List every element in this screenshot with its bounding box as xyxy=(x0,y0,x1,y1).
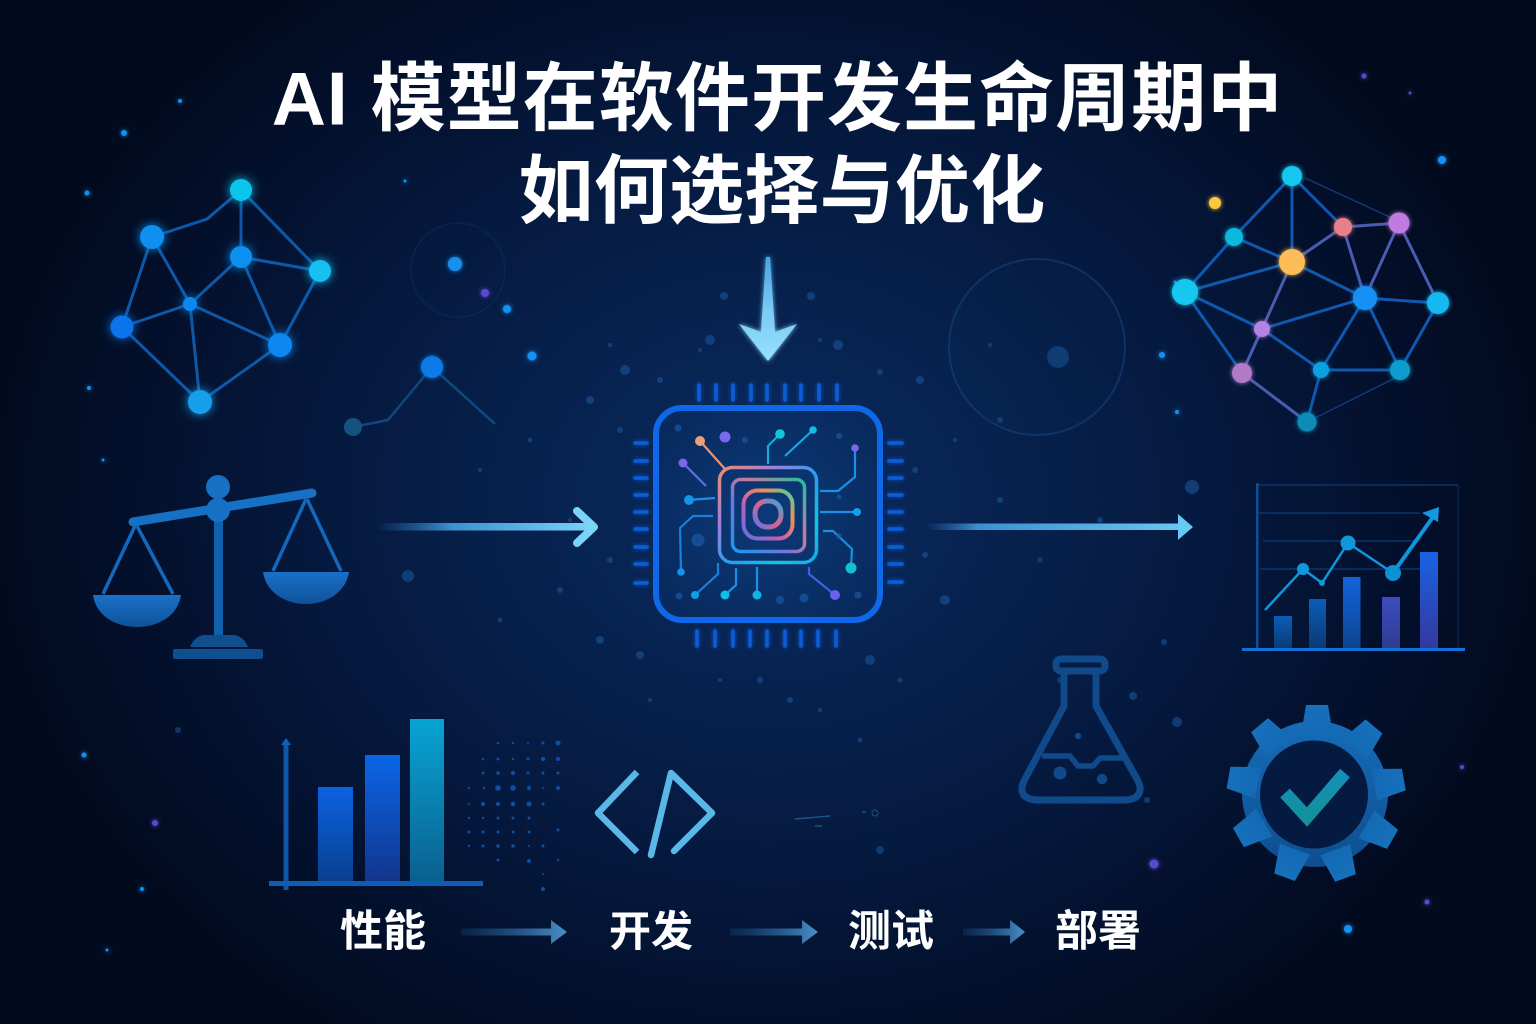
arrow: 性能 to 开发 xyxy=(461,920,567,944)
dot matrix xyxy=(468,740,560,891)
circuit traces xyxy=(680,430,857,595)
label: 测试: 测试 xyxy=(848,908,934,956)
label: 部署: 部署 xyxy=(1055,908,1141,956)
arrow: 测试 to 部署 xyxy=(963,920,1025,944)
icon: gear with check xyxy=(1226,705,1407,883)
background particles xyxy=(82,74,1464,952)
label: 开发: 开发 xyxy=(609,908,693,955)
label: 性能: 性能 xyxy=(340,908,426,956)
icon: code xyxy=(598,772,712,855)
arrow: left to chip xyxy=(375,511,594,543)
chip frame xyxy=(656,408,880,620)
title xyxy=(272,56,1283,233)
icon: network left xyxy=(110,179,331,414)
arrow: chip to right xyxy=(925,514,1193,540)
chip core xyxy=(720,468,816,562)
chip pins xyxy=(635,385,902,646)
icon: network right xyxy=(1172,166,1449,432)
chart: performance bars xyxy=(269,719,483,890)
chart: growth bars xyxy=(1242,483,1465,650)
icon: flask xyxy=(1022,659,1140,800)
icon: balance scale xyxy=(93,475,349,659)
title: AI 模型在软件开发生命周期中 xyxy=(272,56,1283,140)
arrow: 开发 to 测试 xyxy=(730,920,818,944)
chip xyxy=(635,385,902,646)
arrow: top down xyxy=(739,257,797,361)
title: 如何选择与优化 xyxy=(518,149,1046,233)
faint shapes xyxy=(949,259,1125,435)
